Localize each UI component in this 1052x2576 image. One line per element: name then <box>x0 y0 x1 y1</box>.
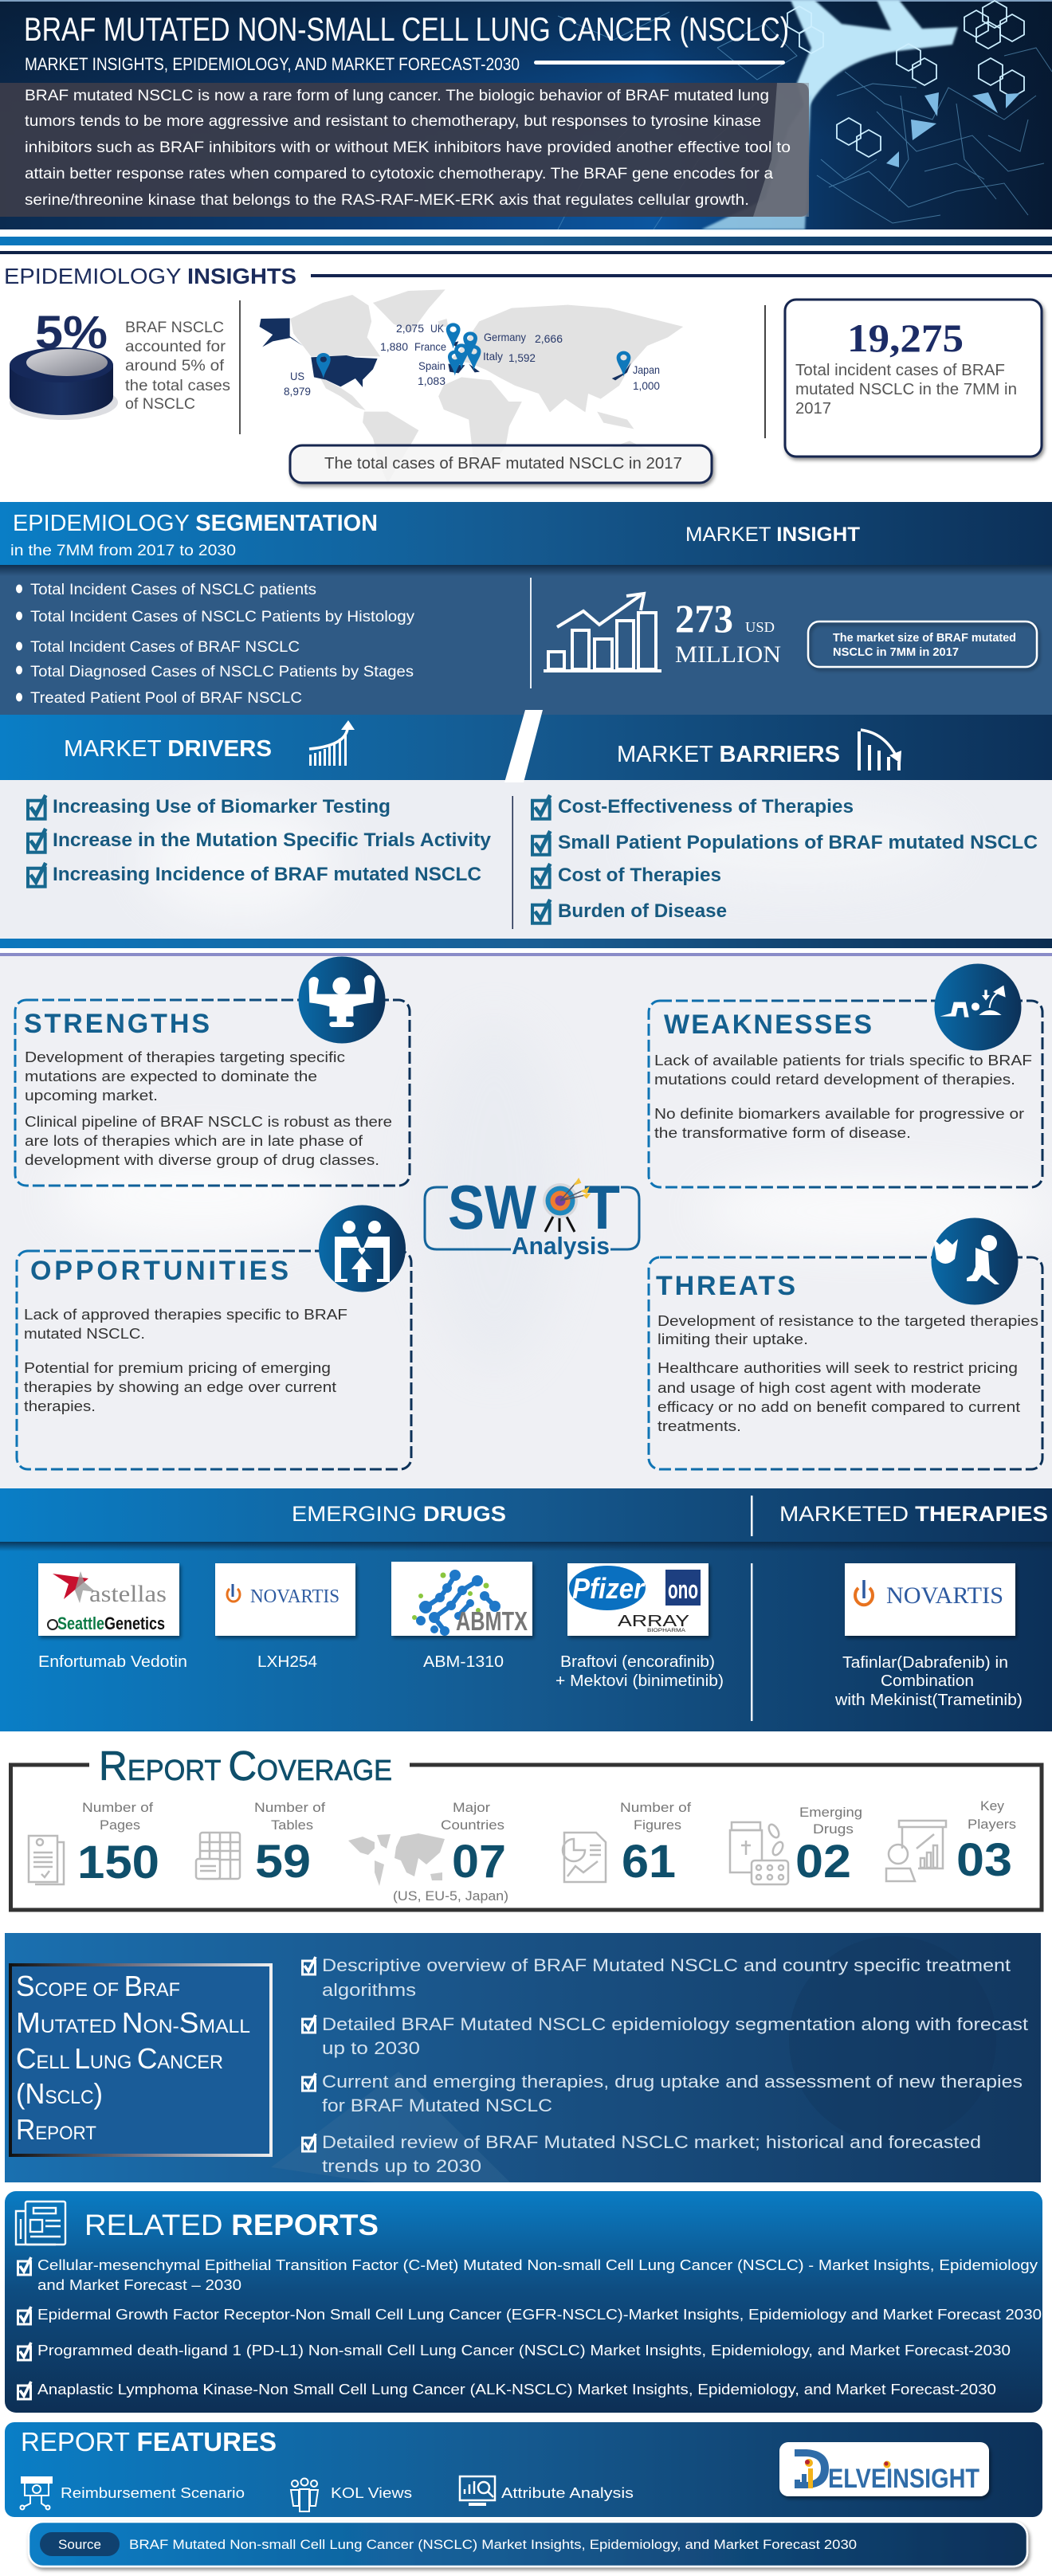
scope list: Descriptive overview of BRAF Mutated NSCLC and country specific treatment <box>322 1955 1011 1975</box>
item: key players: Players <box>968 1817 1016 1832</box>
scope title box: MUTATED NON-SMALL <box>16 2006 250 2039</box>
text: 5 percent description: the total cases <box>125 378 230 394</box>
scope list: Detailed review of BRAF Mutated NSCLC market; historical and forecasted <box>322 2132 981 2152</box>
subtitle rule <box>534 61 785 65</box>
header banner <box>0 0 1052 229</box>
heading: emerging drugs: EMERGING DRUGS <box>292 1502 506 1526</box>
text: 5 percent description: accounted for <box>125 339 226 355</box>
drug captions: LXH254 <box>257 1653 317 1671</box>
related report list: Programmed death-ligand 1 (PD-L1) Non-small Cell Lung Cancer (NSCLC) Market Insights, Epidemiology, and Market Forecast-2030 <box>37 2343 1011 2358</box>
item: key players: Key <box>980 1798 1005 1813</box>
map labels: 1,592 <box>508 351 536 364</box>
text: threats: and usage of high cost agent with moderate <box>658 1380 981 1396</box>
feature: reimbursement scenario <box>21 2477 245 2510</box>
drug captions: with Mekinist(Trametinib) <box>834 1692 1023 1709</box>
stat card: 19,275: mutated NSCLC in the 7MM in <box>795 381 1017 398</box>
list: market drivers: Increasing Incidence of BRAF mutated NSCLC <box>53 864 481 885</box>
text: strengths: Clinical pipeline of BRAF NSCLC is robust as there <box>25 1114 392 1130</box>
item: figures: Figures <box>634 1817 681 1833</box>
item: tables: Number of <box>254 1800 325 1815</box>
text: weaknesses: No definite biomarkers available for progressive or <box>654 1106 1024 1122</box>
text: strengths: development with diverse group of drug classes. <box>25 1152 379 1168</box>
item: figures: Number of <box>620 1800 691 1815</box>
list: market barriers: Small Patient Populations of BRAF mutated NSCLC <box>558 832 1038 853</box>
item: pages <box>29 1800 159 1888</box>
bullet list: Total Incident Cases of BRAF NSCLC <box>30 639 300 656</box>
intro text panel: serine/threonine kinase that belongs to the RAS-RAF-MEK-ERK axis that regulates cellular growth. <box>25 192 749 209</box>
text: threats: Development of resistance to the targeted therapies <box>658 1313 1038 1329</box>
scope title box: SCOPE OF BRAF <box>16 1970 180 2002</box>
intro text panel: attain better response rates when compared to cytotoxic chemotherapy. The BRAF gene encodes for a <box>25 166 773 182</box>
logo: pfizer, ono, array: ARRAY <box>618 1613 689 1630</box>
item: countries <box>348 1800 508 1904</box>
bullet list: Total Incident Cases of NSCLC patients <box>30 582 316 598</box>
drug captions: Enfortumab Vedotin <box>38 1653 187 1671</box>
heading: report coverage: REPORT COVERAGE <box>99 1743 392 1790</box>
stat: 273 USD million: 273 <box>675 596 733 641</box>
bullet list <box>16 582 415 707</box>
feature: reimbursement scenario: Reimbursement Scenario <box>61 2485 245 2501</box>
SWOT analysis logo: Analysis <box>512 1232 610 1260</box>
callout: total cases: The total cases of BRAF mutated NSCLC in 2017 <box>324 455 682 472</box>
heading: report features: REPORT FEATURES <box>21 2427 277 2456</box>
text: strengths: mutations are expected to dominate the <box>25 1068 317 1084</box>
panel: epidemiology segmentation and market insight <box>0 502 1052 716</box>
icon: target <box>543 1179 589 1232</box>
logo: pfizer, ono, array: ono <box>668 1575 698 1604</box>
list: market barriers <box>532 795 1038 923</box>
logo: delveinsight: ELVEINSIGHT <box>828 2464 979 2494</box>
item: countries: Major <box>453 1800 490 1815</box>
drug captions: Braftovi (encorafinib) <box>560 1653 715 1671</box>
stat card: 19,275: Total incident cases of BRAF <box>795 362 1005 379</box>
drug captions: Tafinlar(Dabrafenib) in <box>842 1654 1008 1672</box>
feature: attribute analysis: Attribute Analysis <box>501 2485 634 2501</box>
heading: strengths: STRENGTHS <box>24 1009 210 1039</box>
item: pages: Number of <box>82 1800 153 1815</box>
map labels: 1,880 <box>380 340 408 353</box>
panel: emerging drugs and marketed therapies <box>0 1488 1052 1731</box>
map labels: 8,979 <box>284 385 311 398</box>
text: 5 percent description <box>125 320 230 413</box>
text: threats: treatments. <box>658 1418 741 1434</box>
intro text panel: inhibitors such as BRAF inhibitors with or without MEK inhibitors have provided another effective tool to <box>25 139 791 156</box>
feature: KOL views <box>291 2478 412 2511</box>
text: time span: in the 7MM from 2017 to 2030 <box>10 543 236 559</box>
text: weaknesses <box>654 1053 1032 1141</box>
item: tables: Tables <box>271 1817 313 1833</box>
bullet list: Total Diagnosed Cases of NSCLC Patients by Stages <box>30 664 414 680</box>
item: pages: Pages <box>100 1817 140 1833</box>
source bar: Source <box>58 2537 101 2552</box>
icon: threats <box>931 1217 1019 1305</box>
text: threats: efficacy or no add on benefit compared to current <box>658 1399 1020 1415</box>
heading: market barriers: MARKET BARRIERS <box>617 742 840 767</box>
scope list <box>303 1955 1028 2176</box>
map labels: US <box>290 370 304 382</box>
map labels: Italy <box>483 350 503 363</box>
logo: novartis <box>215 1563 355 1636</box>
list: market drivers <box>28 795 492 887</box>
callout: total cases <box>290 445 712 483</box>
stat: 273 USD million: USD <box>745 619 775 635</box>
map labels: France <box>414 340 446 353</box>
list: market barriers: Cost of Therapies <box>558 865 721 886</box>
item: emerging drugs <box>730 1805 862 1888</box>
text: strengths: are lots of therapies which are in late phase of <box>25 1133 363 1149</box>
panel: report features <box>5 2422 1042 2517</box>
heading: threats: THREATS <box>656 1271 795 1301</box>
map labels: 1,083 <box>418 374 446 387</box>
SWOT analysis logo: T <box>584 1172 620 1242</box>
heading: epidemiology insights: EPIDEMIOLOGY INSIGHTS <box>4 264 296 288</box>
text: 5 percent description: around 5% of <box>125 358 225 374</box>
text: opportunities <box>24 1307 347 1414</box>
item: key players: 03 <box>956 1834 1012 1886</box>
source pill <box>40 2532 120 2556</box>
icon: weaknesses <box>934 964 1022 1050</box>
item: countries: 07 <box>452 1836 506 1888</box>
bullet list: Total Incident Cases of NSCLC Patients by Histology <box>30 609 415 625</box>
light smoky background <box>0 780 1052 1488</box>
scope list: algorithms <box>322 1980 416 2000</box>
heading: market insight: MARKET INSIGHT <box>685 523 860 546</box>
icon: 5 percent cylinder <box>10 307 118 420</box>
feature: attribute analysis <box>460 2476 634 2504</box>
title: BRAF MUTATED NON-SMALL CELL LUNG CANCER (NSCLC) <box>24 10 789 48</box>
drug captions: ABM-1310 <box>423 1653 504 1671</box>
intro text panel: BRAF mutated NSCLC is now a rare form of lung cancer. The biologic behavior of BRAF mutated lung <box>25 88 769 104</box>
text: opportunities: therapies. <box>24 1398 96 1414</box>
heading: epidemiology segmentation: EPIDEMIOLOGY SEGMENTATION <box>13 511 378 536</box>
scope list: up to 2030 <box>322 2038 420 2058</box>
feature: KOL views: KOL Views <box>331 2485 412 2501</box>
icon: growth chart <box>544 594 661 672</box>
icon: report document <box>16 2202 65 2245</box>
logo: astellas and seattle genetics <box>38 1563 179 1636</box>
item: tables: 59 <box>255 1836 311 1888</box>
stat: 273 USD million <box>675 596 781 668</box>
panel: weaknesses <box>649 964 1042 1187</box>
related report list: and Market Forecast – 2030 <box>37 2277 241 2293</box>
item: emerging drugs: Drugs <box>813 1821 854 1837</box>
text: 5 percent description: of NSCLC <box>125 396 195 413</box>
item: tables <box>196 1800 325 1888</box>
list: market barriers: Burden of Disease <box>558 900 727 922</box>
scope list: Current and emerging therapies, drug uptake and assessment of new therapies <box>322 2072 1023 2092</box>
item: emerging drugs: 02 <box>795 1836 851 1888</box>
map labels: 1,000 <box>633 379 660 392</box>
callout: market size: NSCLC in 7MM in 2017 <box>833 645 959 659</box>
panel: report coverage <box>11 1743 1042 1910</box>
icon: strengths <box>298 956 386 1044</box>
world map <box>260 289 683 484</box>
item: figures <box>563 1800 691 1888</box>
text: opportunities: therapies by showing an edge over current <box>24 1379 336 1395</box>
scope title box <box>9 1963 273 2157</box>
logo: pfizer, ono, array <box>567 1563 709 1636</box>
logo: ABMTX: ABMTX <box>456 1606 528 1636</box>
item: countries: (US, EU-5, Japan) <box>393 1888 508 1904</box>
text: opportunities: Potential for premium pricing of emerging <box>24 1360 331 1376</box>
related report list: Cellular-mesenchymal Epithelial Transition Factor (C-Met) Mutated Non-small Cell Lung Cancer (NSCLC) - Market Insights, Epidemiology <box>37 2257 1038 2273</box>
scope title box: CELL LUNG CANCER <box>16 2042 223 2075</box>
text: strengths <box>25 1049 392 1168</box>
logo: pfizer, ono, array: BIOPHARMA <box>647 1629 685 1633</box>
slash divider <box>504 710 543 782</box>
drug captions: Combination <box>881 1672 974 1690</box>
logo: novartis marketed: NOVARTIS <box>886 1582 1003 1609</box>
SWOT analysis logo <box>425 1172 639 1260</box>
text: opportunities: mutated NSCLC. <box>24 1326 145 1342</box>
logo: ABMTX <box>391 1562 532 1636</box>
text: threats: Healthcare authorities will seek to restrict pricing <box>658 1360 1018 1376</box>
related report list: Epidermal Growth Factor Receptor-Non Small Cell Lung Cancer (EGFR-NSCLC)-Market Insights, Epidemiology and Market Forecast 2030 <box>37 2307 1042 2323</box>
heading: opportunities: OPPORTUNITIES <box>30 1256 289 1286</box>
source text: BRAF Mutated Non-small Cell Lung Cancer (NSCLC) Market Insights, Epidemiology, and Market Forecast 2030 <box>129 2537 857 2552</box>
text: weaknesses: mutations could retard development of therapies. <box>654 1072 1015 1088</box>
icon: barriers decline <box>858 730 901 770</box>
panel: threats <box>649 1217 1042 1469</box>
item: key players <box>886 1798 1016 1886</box>
map labels: Japan <box>633 363 660 376</box>
text: weaknesses: the transformative form of disease. <box>654 1125 911 1141</box>
logo: novartis marketed <box>845 1563 1015 1636</box>
icon: 5 percent cylinder: 5% <box>35 307 108 359</box>
text: weaknesses: Lack of available patients for trials specific to BRAF <box>654 1053 1032 1068</box>
text: 5 percent description: BRAF NSCLC <box>125 320 224 336</box>
text: opportunities: Lack of approved therapies specific to BRAF <box>24 1307 347 1323</box>
panel: related reports <box>5 2191 1042 2413</box>
stat: 273 USD million: MILLION <box>675 641 781 668</box>
icon: opportunities <box>319 1205 406 1292</box>
item: figures: 61 <box>622 1836 676 1888</box>
heading: marketed therapies: MARKETED THERAPIES <box>779 1502 1048 1526</box>
callout: market size <box>808 621 1037 667</box>
scope list: Detailed BRAF Mutated NSCLC epidemiology segmentation along with forecast <box>322 2014 1028 2034</box>
related report list: Anaplastic Lymphoma Kinase-Non Small Cell Lung Cancer (ALK-NSCLC) Market Insights, Epidemiology, and Market Forecast-2030 <box>37 2382 996 2398</box>
related report list <box>18 2257 1042 2399</box>
text: strengths: upcoming market. <box>25 1088 158 1104</box>
map labels: Spain <box>418 359 446 372</box>
map labels: 2,075 <box>396 322 424 335</box>
item: countries: Countries <box>441 1817 504 1833</box>
list: market drivers: Increase in the Mutation Specific Trials Activity <box>53 829 492 851</box>
map labels: UK <box>430 322 445 335</box>
logo: astellas and seattle genetics: astellas <box>89 1581 167 1607</box>
text: threats <box>658 1313 1038 1434</box>
band: market drivers and barriers <box>0 710 1052 782</box>
bullet list: Treated Patient Pool of BRAF NSCLC <box>30 690 302 707</box>
logo: pfizer, ono, array: Pfizer <box>572 1572 646 1605</box>
scope title box: (NSCLC) <box>16 2077 103 2110</box>
map labels: 2,666 <box>535 332 563 345</box>
scope title box: REPORT <box>16 2113 96 2146</box>
map labels <box>284 322 660 398</box>
list: market drivers: Increasing Use of Biomarker Testing <box>53 796 391 817</box>
heading: market drivers: MARKET DRIVERS <box>64 736 272 762</box>
item: pages: 150 <box>77 1837 159 1888</box>
drug captions <box>38 1653 1023 1709</box>
map labels: Germany <box>484 331 526 343</box>
stat card: 19,275: 19,275 <box>847 316 964 360</box>
text: threats: limiting their uptake. <box>658 1331 808 1347</box>
icon: drivers growth <box>309 720 355 766</box>
text: strengths: Development of therapies targeting specific <box>25 1049 345 1065</box>
panel: scope of report <box>5 1933 1041 2182</box>
stat card: 19,275 <box>785 300 1042 457</box>
source bar <box>29 2522 1027 2566</box>
logo: delveinsight <box>779 2442 989 2496</box>
list: market barriers: Cost-Effectiveness of Therapies <box>558 796 854 817</box>
heading: related reports: RELATED REPORTS <box>84 2209 379 2241</box>
drug captions: + Mektovi (binimetinib) <box>555 1672 724 1690</box>
intro text panel <box>0 83 809 217</box>
scope list: for BRAF Mutated NSCLC <box>322 2096 552 2115</box>
callout: market size: The market size of BRAF mutated <box>833 631 1016 645</box>
intro text panel: tumors tends to be more aggressive and resistant to chemotherapy, but responses to tyrosine kinase <box>25 113 761 130</box>
SWOT analysis logo: SW <box>448 1172 536 1242</box>
panel: opportunities <box>17 1205 411 1469</box>
heading: weaknesses: WEAKNESSES <box>664 1010 872 1040</box>
panel: strengths <box>15 956 410 1186</box>
subtitle: MARKET INSIGHTS, EPIDEMIOLOGY, AND MARKET FORECAST-2030 <box>25 54 520 74</box>
stat card: 19,275: 2017 <box>795 400 831 418</box>
scope list: trends up to 2030 <box>322 2156 481 2176</box>
logo: novartis: NOVARTIS <box>250 1586 340 1607</box>
logo: astellas and seattle genetics: SeattleGenetics <box>57 1613 165 1633</box>
item: emerging drugs: Emerging <box>799 1805 862 1820</box>
